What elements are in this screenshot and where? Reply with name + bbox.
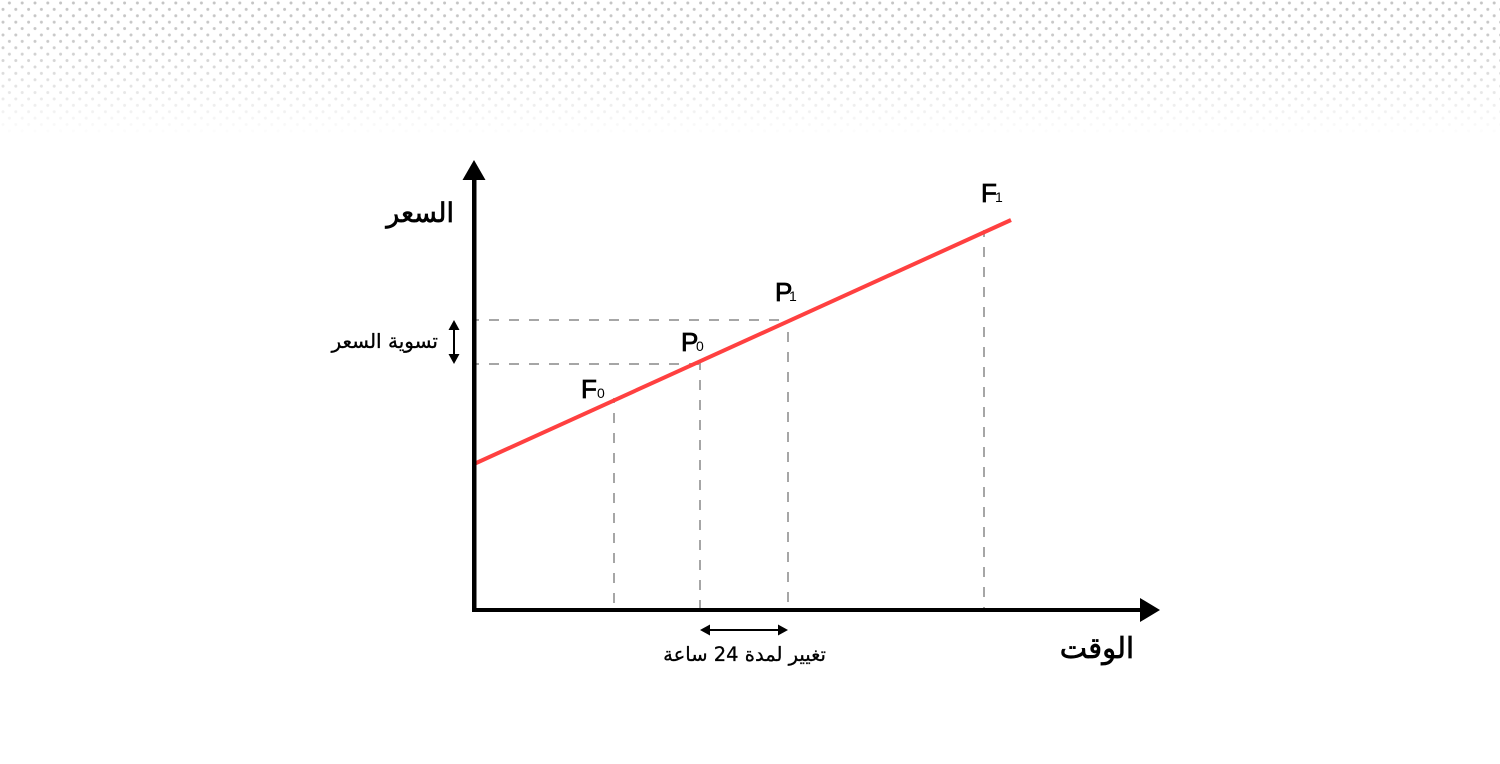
point label P0: 0 [696, 338, 704, 354]
24 hour change label: تغيير لمدة 24 ساعة [663, 643, 826, 666]
point label F1: 1 [995, 189, 1003, 205]
price adjustment label: تسوية السعر [330, 329, 438, 353]
axis label: price: السعر [384, 198, 454, 229]
point label F0: 0 [597, 385, 605, 401]
price adjustment arrow [448, 320, 460, 364]
point label F0 [581, 374, 605, 404]
point label F0: F [581, 374, 597, 404]
dashed guide lines [476, 230, 984, 608]
price trend line [474, 220, 1011, 464]
24 hour change arrow [700, 624, 788, 636]
point label P1: P [775, 277, 792, 307]
point label P0: P [681, 327, 698, 357]
dotted background band [0, 0, 1500, 136]
point label F1: F [981, 178, 997, 208]
vertical axis arrow [462, 160, 486, 612]
point label P1: 1 [789, 288, 797, 304]
horizontal axis arrow [472, 598, 1160, 622]
axis label: time: الوقت [1060, 631, 1134, 665]
chart [330, 160, 1160, 666]
